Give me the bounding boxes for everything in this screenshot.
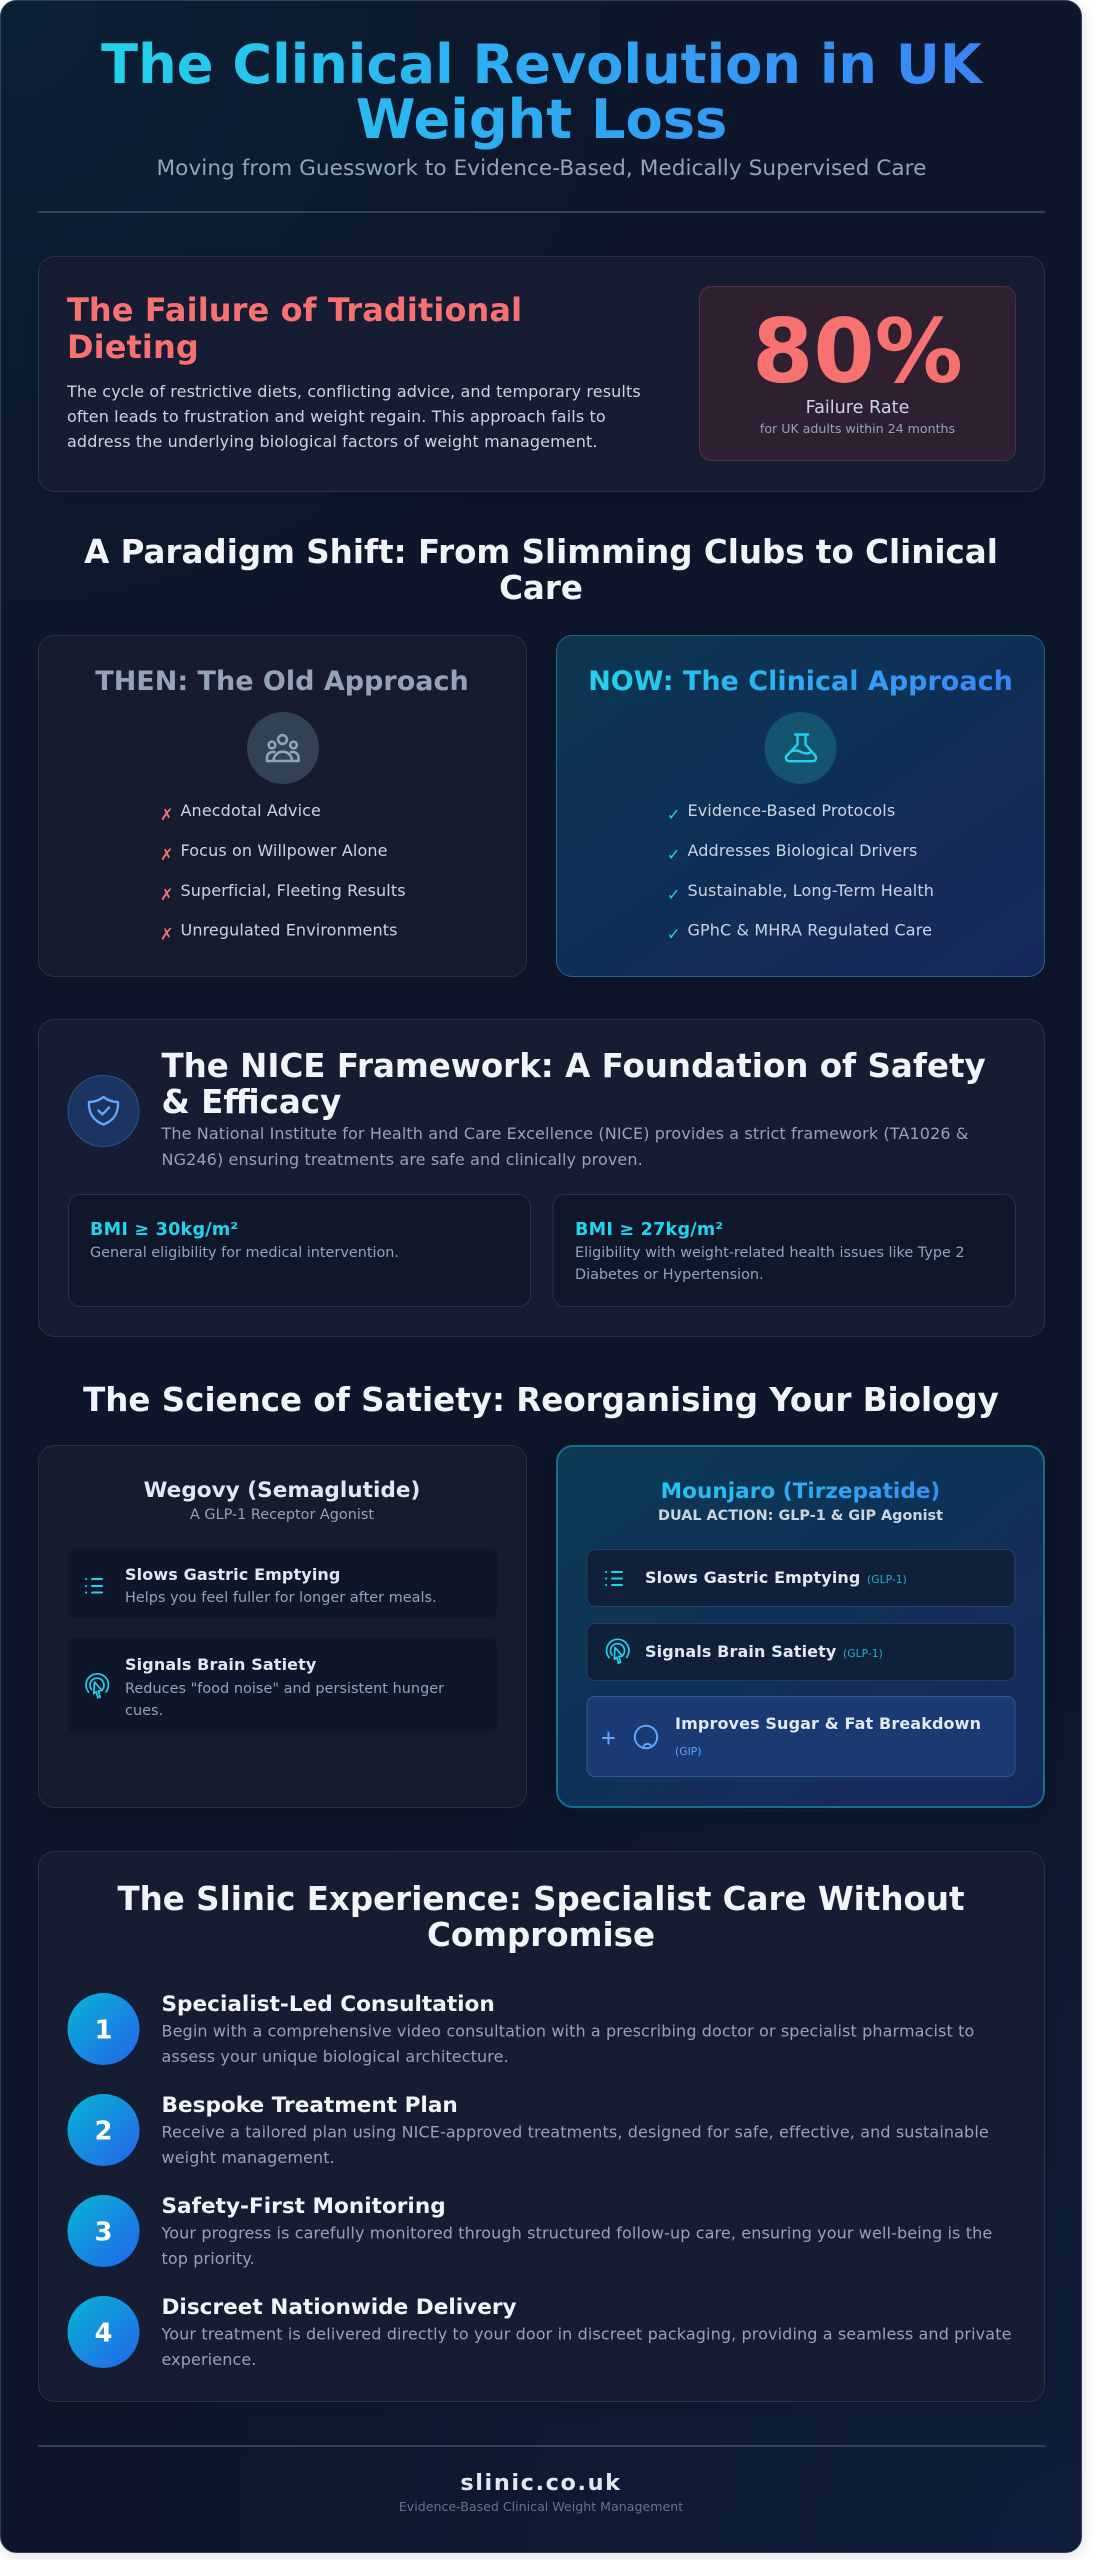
card: BMI 30: BMI ≥ 30kg/m² [90,1220,238,1240]
title: Weight Loss [356,88,727,151]
step 1: 1 [95,2016,112,2046]
heading: experience: The Slinic Experience: Specialist Care Without [118,1880,964,1918]
stat callout: 80% failure rate: 80% [752,300,963,403]
feature: improves sugar and fat breakdown, GIP [587,1696,1015,1776]
panel: NICE framework [38,1020,1044,1336]
step 4 [68,2295,1012,2369]
step 1: Begin with a comprehensive video consultation with a prescribing doctor or specialist pharmacist to [162,2022,974,2040]
card: BMI 30 [68,1194,530,1306]
card: BMI 27: Diabetes or Hypertension. [575,1267,764,1283]
feature: signals brain satiety: Signals Brain Satiety [125,1655,317,1674]
heading: failure [67,291,522,366]
icon: people group [247,712,319,784]
step 1 [68,1992,974,2066]
step 3: Your progress is carefully monitored through structured follow-up care, ensuring your well-being is the [160,2224,992,2242]
panel: failure of traditional dieting [38,256,1044,492]
heading: now: NOW: The Clinical Approach [588,666,1013,697]
list: clinical approach items: Addresses Biological Drivers [688,841,917,860]
heading: experience [118,1880,964,1954]
title [101,33,984,151]
icon: radar cursor [86,1674,108,1698]
list: old approach items: Superficial, Fleeting Results [180,881,406,900]
footer [38,2445,1045,2514]
step 3 [68,2194,992,2268]
panel: then, the old approach [38,636,526,976]
heading: Mounjaro: Mounjaro (Tirzepatide) [661,1479,940,1504]
list: clinical approach items: ✓ [667,885,680,904]
list: old approach items: Focus on Willpower Alone [180,841,388,860]
feature: signals brain satiety, GLP-1 [587,1624,1015,1680]
step 1: assess your unique biological architecture. [162,2047,509,2066]
heading: NICE framework [162,1047,986,1121]
icon: shield [68,1076,139,1146]
list: old approach items: Unregulated Environments [180,920,398,940]
list: old approach items: ✗ [160,885,173,904]
header [38,33,1045,213]
icon: circle gauge [635,1726,657,1748]
footer: slinic.co.uk [460,2470,622,2496]
panel: Mounjaro [557,1446,1044,1807]
feature: slows gastric emptying, GLP-1: (GLP-1) [867,1573,907,1586]
card: BMI 27 [553,1194,1016,1306]
feature: slows gastric emptying: Helps you feel fuller for longer after meals. [125,1590,437,1606]
heading: paradigm shift [84,533,998,607]
list: old approach items: ✗ [160,845,173,864]
list: clinical approach items: Evidence-Based Protocols [688,801,895,820]
step 2: Bespoke Treatment Plan [162,2093,458,2118]
list: clinical approach items [667,801,934,944]
title: The Clinical Revolution in UK [101,33,984,96]
feature: slows gastric emptying: Slows Gastric Emptying [125,1565,341,1584]
text block: failure description: often leads to frustration and weight regain. This approach fails to [67,407,606,426]
heading: failure: Dieting [67,328,199,366]
step 2: Receive a tailored plan using NICE-approved treatments, designed for safe, effective, and sustainable [162,2122,989,2142]
step 4: experience. [162,2350,257,2369]
feature: signals brain satiety [68,1638,497,1733]
card: BMI 30: General eligibility for medical intervention. [90,1245,399,1261]
card: BMI 27: Eligibility with weight-related health issues like Type 2 [575,1245,965,1261]
icon: plus [603,1732,614,1744]
list: old approach items: ✗ [160,805,173,824]
list: old approach items: ✗ [160,924,173,944]
card: BMI 27: BMI ≥ 27kg/m² [575,1220,723,1240]
panel: Wegovy [38,1446,526,1808]
footer: Evidence-Based Clinical Weight Management [399,2499,683,2514]
feature: improves sugar and fat breakdown, GIP: Improves Sugar & Fat Breakdown [675,1714,981,1733]
list: old approach items: Anecdotal Advice [180,801,321,820]
heading: then: THEN: The Old Approach [95,666,469,697]
step 2: 2 [95,2116,112,2146]
feature: signals brain satiety, GLP-1: Signals Brain Satiety [645,1642,837,1661]
heading: Wegovy: Wegovy (Semaglutide) [144,1478,420,1503]
step 2: weight management. [162,2148,335,2167]
icon: list [606,1572,622,1585]
icon: radar cursor [607,1639,629,1663]
list: clinical approach items: GPhC & MHRA Regulated Care [688,920,932,940]
text block: failure description [66,382,641,451]
stat callout: 80% failure rate: Failure Rate [806,398,909,418]
feature: signals brain satiety: Reduces "food noise" and persistent hunger [125,1681,444,1697]
step 4: 4 [95,2318,112,2348]
subheading: Mounjaro: DUAL ACTION: GLP-1 & GIP Agonist [658,1508,943,1524]
step 4: Your treatment is delivered directly to your door in discreet packaging, providing a seamless and private [160,2324,1012,2344]
feature: slows gastric emptying, GLP-1: Slows Gastric Emptying [645,1568,861,1587]
step 1: Specialist-Led Consultation [162,1992,495,2017]
heading: NICE framework: The NICE Framework: A Foundation of Safety [162,1047,986,1085]
text block: NICE description: The National Institute for Health and Care Excellence (NICE) provides a strict framework (TA1026 & [160,1124,968,1143]
panel: the Slinic experience [38,1852,1044,2402]
feature: signals brain satiety: cues. [125,1703,163,1719]
heading: NICE framework: & Efficacy [162,1083,341,1121]
heading: science of satiety: The Science of Satiety: Reorganising Your Biology [83,1381,999,1419]
step 2 [68,2093,989,2167]
step 3: Safety-First Monitoring [162,2194,446,2219]
feature: improves sugar and fat breakdown, GIP: (GIP) [675,1745,702,1758]
subheading: Wegovy: A GLP-1 Receptor Agonist [190,1507,374,1523]
heading: experience: Compromise [427,1916,655,1954]
subtitle: Moving from Guesswork to Evidence-Based, Medically Supervised Care [157,156,926,181]
text block: failure description: address the underlying biological factors of weight management. [67,432,598,451]
list: old approach items [160,801,406,944]
text block: NICE description: NG246) ensuring treatments are safe and clinically proven. [162,1150,643,1169]
feature: slows gastric emptying, GLP-1 [587,1550,1015,1606]
feature: signals brain satiety, GLP-1: (GLP-1) [843,1647,883,1660]
step 3: 3 [95,2218,112,2248]
list: clinical approach items: Sustainable, Long-Term Health [688,881,934,900]
text block: NICE description [160,1124,968,1169]
step 4: Discreet Nationwide Delivery [162,2295,517,2320]
heading: paradigm shift: Care [499,569,583,607]
list: clinical approach items: ✓ [667,924,680,944]
list: clinical approach items: ✓ [667,805,680,824]
step 3: top priority. [162,2249,255,2268]
icon: flask [764,712,836,784]
heading: failure: The Failure of Traditional [67,291,522,329]
icon: list [86,1579,102,1592]
list: clinical approach items: ✓ [667,845,680,864]
stat callout: 80% failure rate: for UK adults within 24 months [760,421,955,436]
stat callout: 80% failure rate [700,286,1016,460]
text block: failure description: The cycle of restrictive diets, conflicting advice, and temporary results [66,382,641,401]
panel: now, the clinical approach [556,636,1044,976]
feature: slows gastric emptying [68,1548,497,1618]
heading: paradigm shift: A Paradigm Shift: From Slimming Clubs to Clinical [84,533,998,571]
